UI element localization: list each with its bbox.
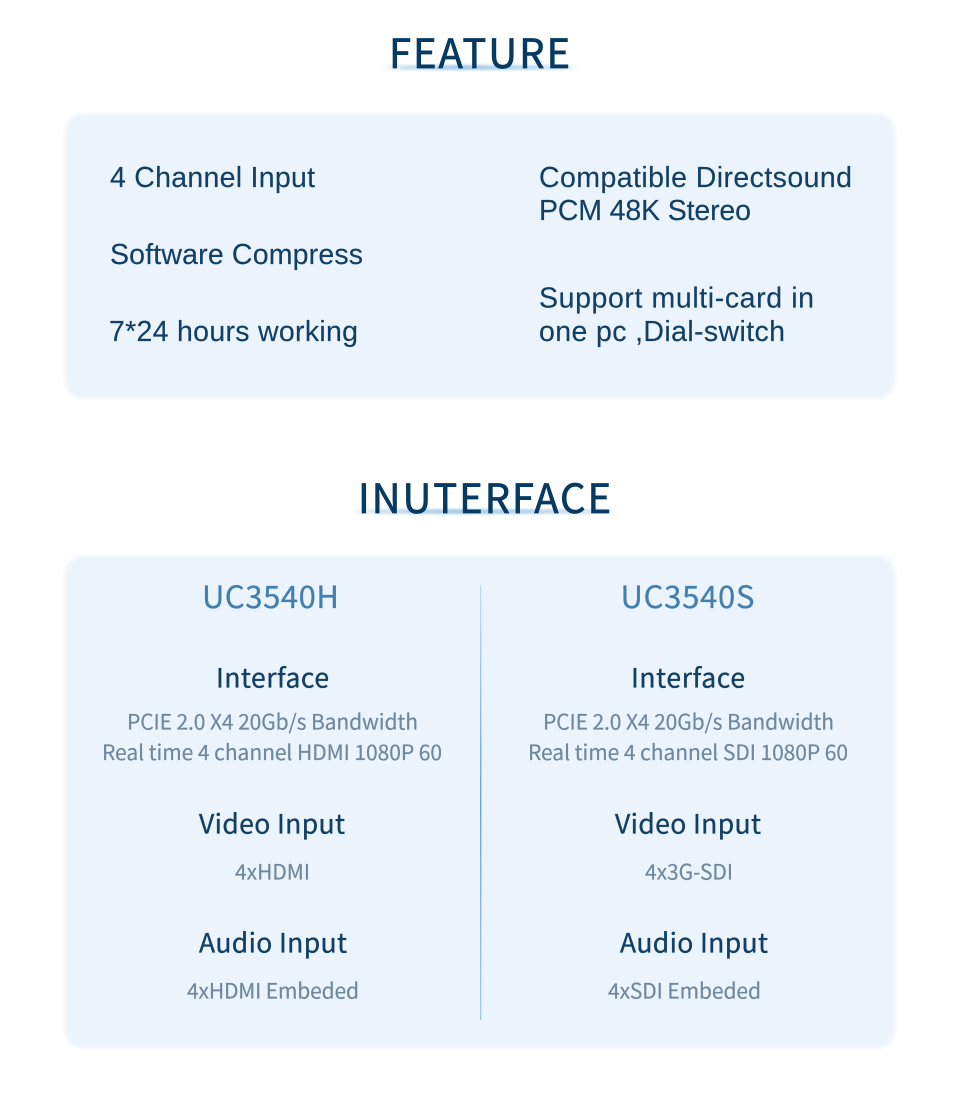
detail: video ports: 4x3G-SDI bbox=[645, 856, 733, 886]
subheading: Interface: Interface bbox=[631, 656, 745, 696]
detail: bandwidth: PCIE 2.0 X4 20Gb/s Bandwidth bbox=[543, 706, 834, 736]
detail: HDMI channels: Real time 4 channel HDMI 1080P 60 bbox=[102, 737, 442, 767]
panel: interface comparison bbox=[65, 556, 895, 1048]
divider between models bbox=[480, 585, 481, 1020]
text: PCM 48K Stereo: PCM 48K Stereo bbox=[539, 195, 751, 227]
detail: video ports: 4xHDMI bbox=[235, 856, 310, 886]
subheading: Audio Input: Audio Input bbox=[620, 922, 768, 960]
detail: bandwidth: PCIE 2.0 X4 20Gb/s Bandwidth bbox=[127, 706, 418, 736]
panel: feature list bbox=[65, 114, 895, 398]
text: Software Compress: Software Compress bbox=[110, 239, 363, 271]
detail: audio ports: 4xSDI Embeded bbox=[608, 976, 761, 1006]
subheading: Audio Input: Audio Input bbox=[199, 922, 347, 960]
text: 4 Channel Input: 4 Channel Input bbox=[110, 162, 315, 194]
heading: INUTERFACE: INUTERFACE bbox=[358, 467, 611, 525]
text: Support multi-card in: Support multi-card in bbox=[539, 282, 814, 314]
column: UC3540H bbox=[102, 572, 442, 1006]
heading: FEATURE: FEATURE bbox=[389, 22, 570, 80]
detail: SDI channels: Real time 4 channel SDI 1080P 60 bbox=[528, 737, 848, 767]
subheading: Video Input: Video Input bbox=[615, 802, 761, 842]
text: Compatible Directsound: Compatible Directsound bbox=[539, 162, 852, 194]
column: UC3540S bbox=[528, 572, 848, 1006]
detail: audio ports: 4xHDMI Embeded bbox=[187, 976, 359, 1006]
subheading: Interface: Interface bbox=[216, 656, 329, 696]
model name: UC3540H: UC3540H bbox=[202, 572, 339, 617]
subheading: Video Input: Video Input bbox=[199, 802, 345, 842]
model name: UC3540S: UC3540S bbox=[620, 572, 754, 617]
text: 7*24 hours working: 7*24 hours working bbox=[109, 316, 358, 348]
text: one pc ,Dial-switch: one pc ,Dial-switch bbox=[539, 316, 785, 348]
